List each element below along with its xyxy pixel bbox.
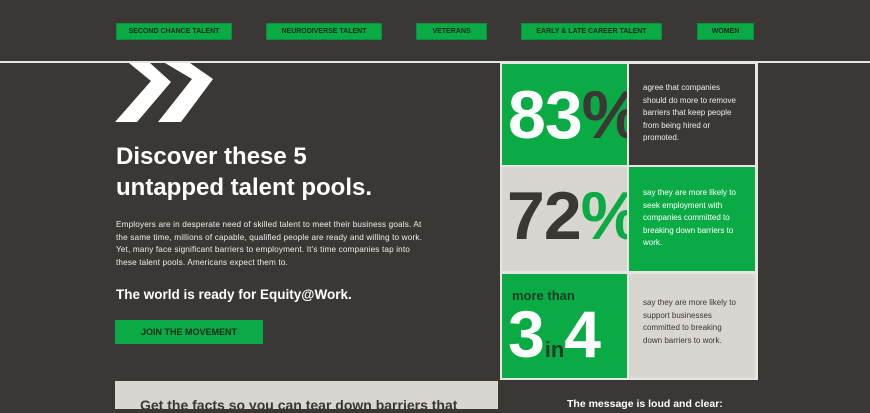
- stat 3in4 number: more than: [512, 288, 575, 303]
- nav button: WOMEN: [712, 28, 739, 35]
- stat 3in4 text: [629, 274, 755, 378]
- stat 83 text: [629, 64, 755, 165]
- nav button: NEURODIVERSE TALENT: [281, 28, 367, 35]
- panel: get the facts: Get the facts so you can tear down barriers that: [140, 397, 457, 413]
- stat 3in4 number: 3in4: [508, 297, 601, 371]
- nav button: SECOND CHANCE TALENT: [129, 28, 219, 35]
- stats grid: [500, 62, 758, 380]
- body text: Employers are in desperate need of skilled talent to meet their business goals. At the same time, millions of capable, qualified people are ready and willing to work. Yet, many face significant barriers to employment. It’s time companies tap into these talent pools. Americans expect them to.: [116, 220, 422, 267]
- nav button: [521, 23, 662, 40]
- title: [116, 143, 372, 201]
- button: join: [115, 320, 263, 344]
- nav button: [116, 23, 232, 40]
- nav button: [416, 23, 487, 40]
- stat 72 text: [629, 167, 755, 271]
- stat 72 text: say they are more likely to seek employment with companies committed to breaking down barriers to work.: [643, 188, 736, 247]
- stat 83 text: agree that companies should do more to remove barriers that keep people from being hired or promoted.: [643, 83, 736, 142]
- nav button: [697, 23, 754, 40]
- stat 3in4 text: say they are more likely to support businesses committed to breaking down barriers to work.: [643, 298, 736, 345]
- button: join: JOIN THE MOVEMENT: [141, 327, 237, 337]
- title: Discover these 5: [116, 143, 307, 170]
- nav button: EARLY & LATE CAREER TALENT: [536, 28, 647, 35]
- panel: get the facts: [115, 381, 498, 409]
- stat 3in4 number: [502, 274, 627, 378]
- subheading: The world is ready for Equity@Work.: [116, 287, 352, 302]
- nav button: VETERANS: [432, 28, 471, 35]
- icon: chevrons: [115, 63, 213, 122]
- nav: talent pools: [116, 23, 754, 40]
- heading: message: The message is loud and clear:: [567, 398, 723, 410]
- nav button: [266, 23, 382, 40]
- title: untapped talent pools.: [116, 174, 372, 201]
